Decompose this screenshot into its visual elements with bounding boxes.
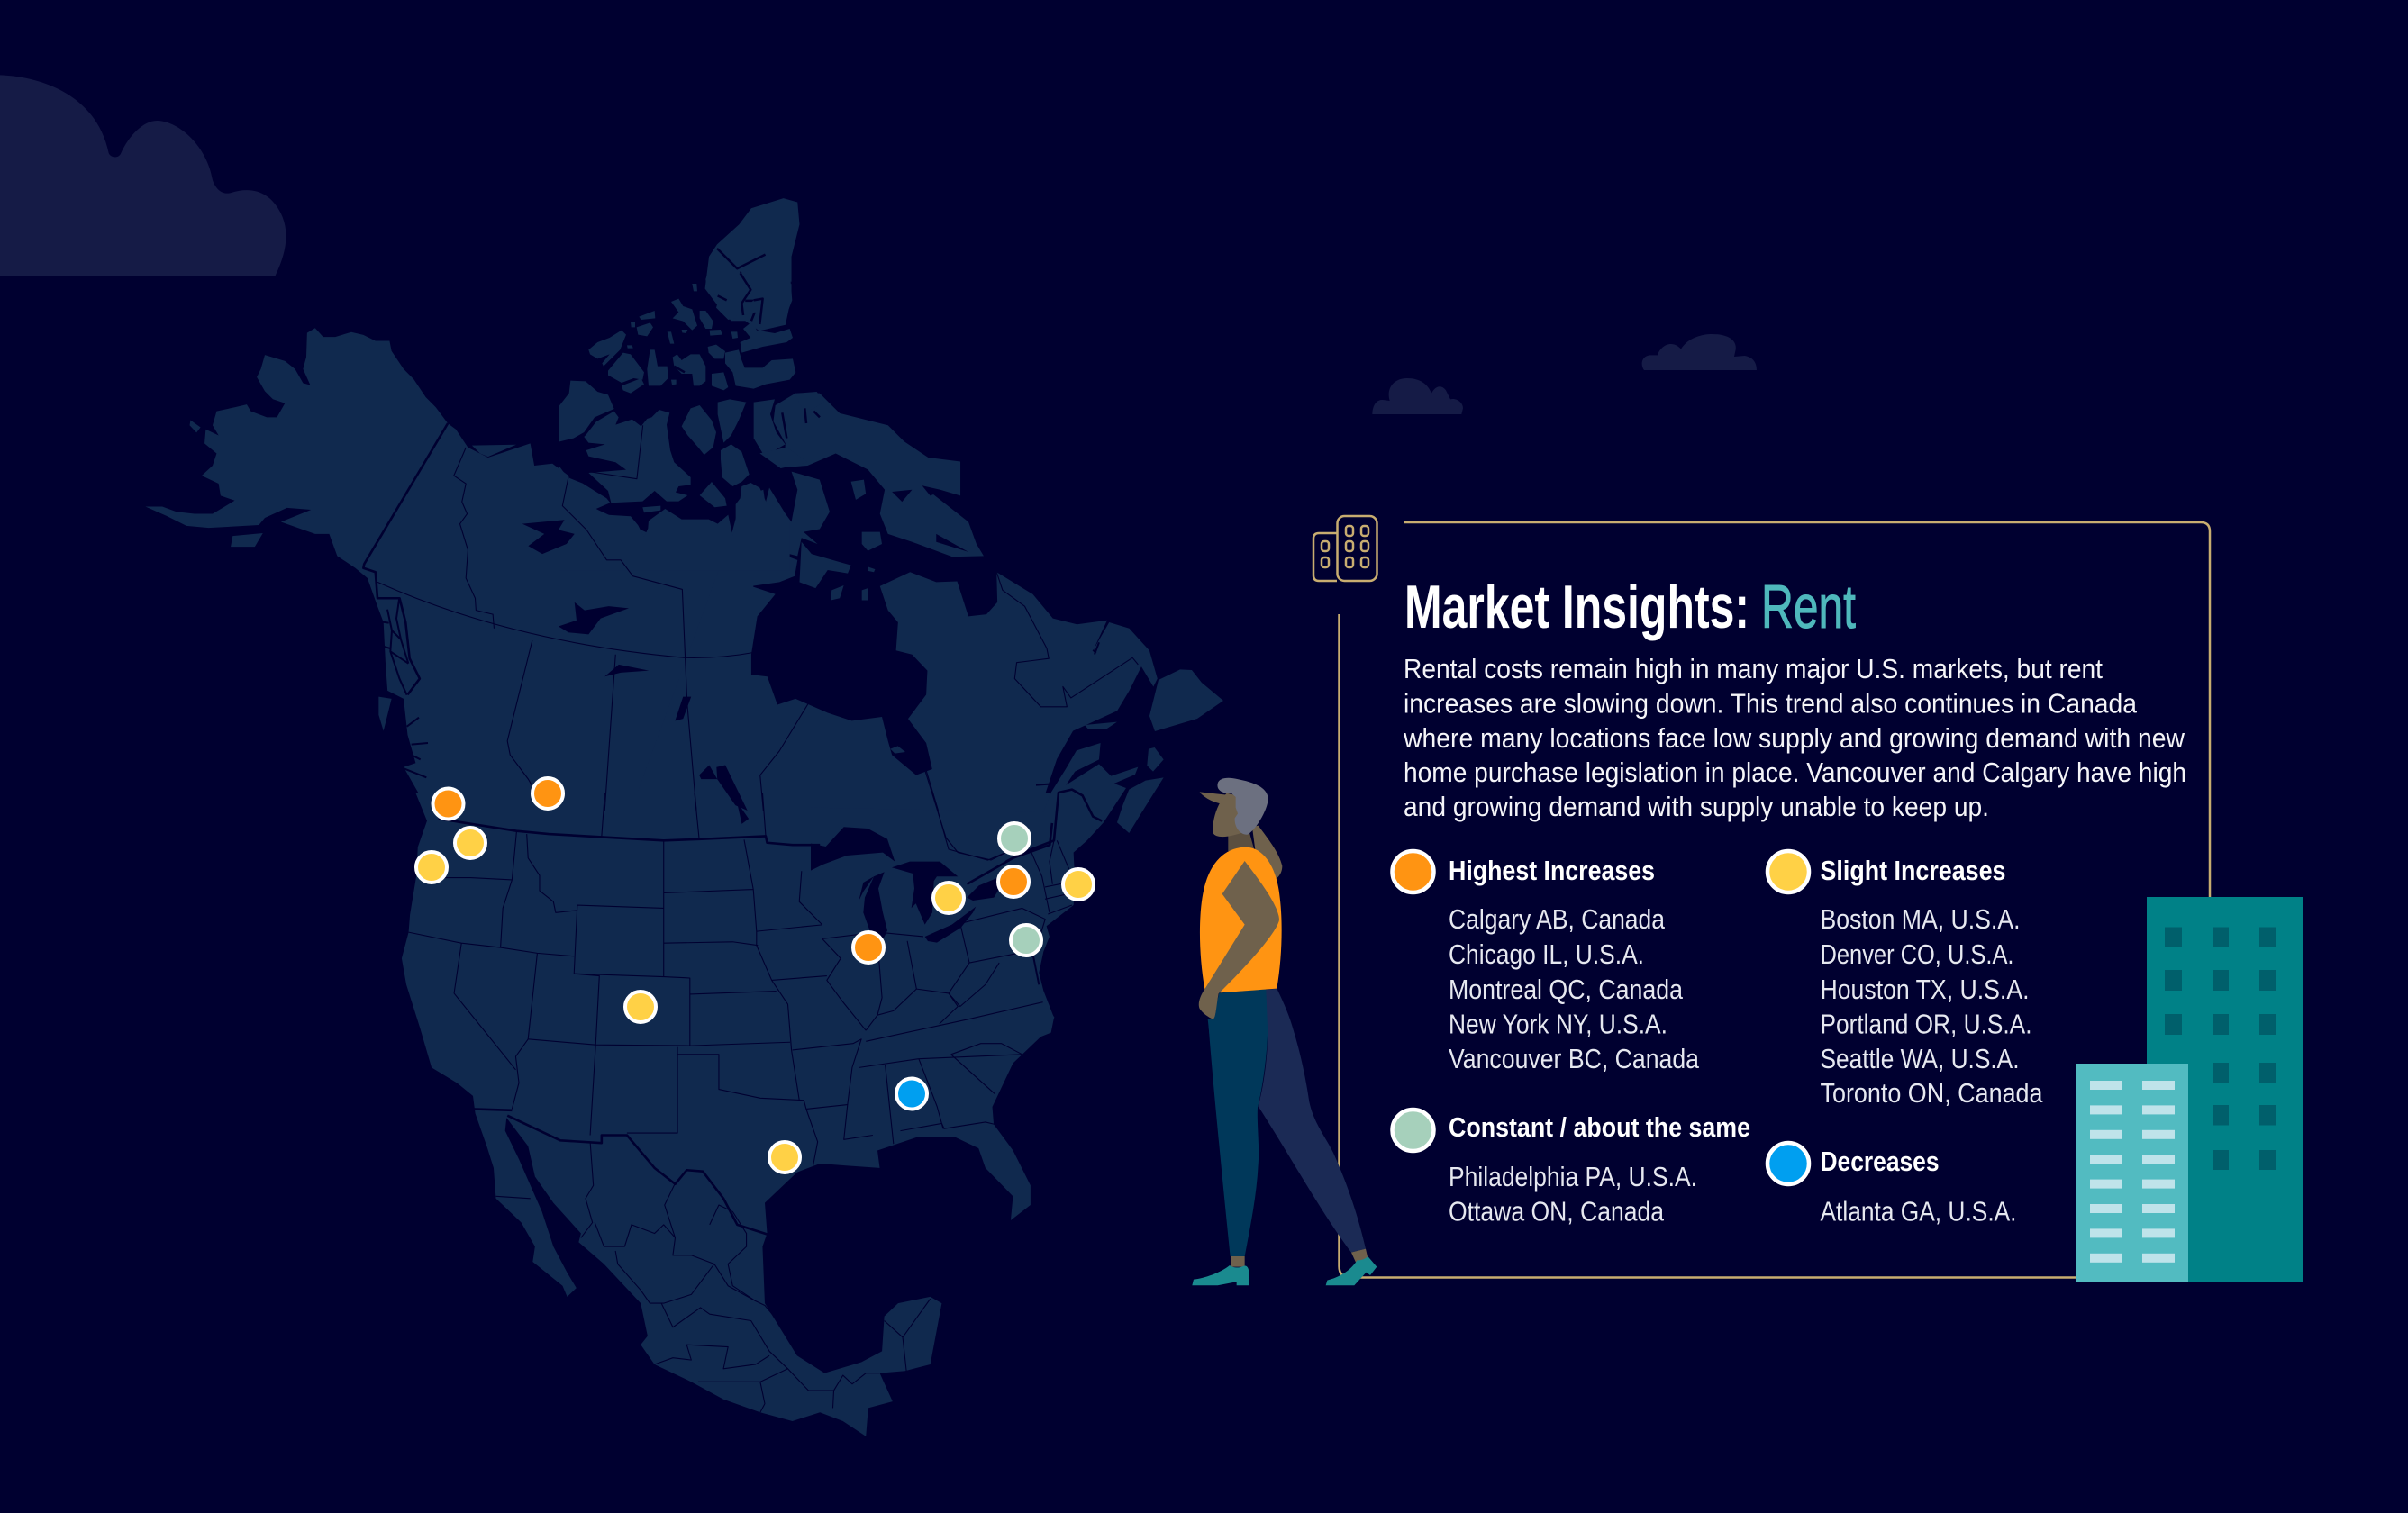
illustration: person bbox=[1192, 778, 1377, 1285]
legend: constant: Constant / about the same bbox=[1449, 1111, 1750, 1143]
land: Arctic archipelago and mainland Arctic coast bbox=[559, 270, 824, 570]
border lines: northeast U.S. bbox=[925, 770, 1102, 914]
person lower body bbox=[1192, 1027, 1377, 1285]
legend: slight increases bbox=[1767, 851, 2043, 1109]
legend: decreases: Decreases bbox=[1820, 1146, 1939, 1177]
legend: highest increases: New York NY, U.S.A. bbox=[1449, 1009, 1667, 1039]
illustration: short building bbox=[2076, 1064, 2188, 1282]
marker: Philadelphia, constant bbox=[1011, 925, 1041, 956]
map of North America bbox=[145, 198, 1223, 1436]
intro paragraph: Rental costs remain high in many major U.S. markets, but rent bbox=[1404, 653, 2103, 684]
icon: buildings bbox=[1313, 516, 1377, 581]
intro paragraph: and growing demand with supply unable to keep up. bbox=[1404, 791, 1989, 822]
legend: slight increases: Toronto ON, Canada bbox=[1820, 1077, 2043, 1109]
legend: highest increases: Montreal QC, Canada bbox=[1449, 974, 1684, 1005]
border lines: eastern Canada bbox=[760, 572, 1138, 811]
intro paragraph: increases are slowing down. This trend also continues in Canada bbox=[1404, 688, 2138, 719]
illustration: tall building bbox=[2147, 897, 2303, 1282]
border lines: Canada bbox=[363, 423, 753, 811]
marker: Denver, slight increase bbox=[625, 992, 656, 1022]
legend: highest increases: Chicago IL, U.S.A. bbox=[1449, 938, 1644, 970]
legend: highest increases: Calgary AB, Canada bbox=[1449, 903, 1666, 935]
marker: Montreal, highest increase bbox=[998, 866, 1029, 897]
small cloud left bbox=[1372, 378, 1463, 414]
intro paragraph: home purchase legislation in place. Vancouver and Calgary have high bbox=[1404, 756, 2186, 788]
title: Market Insights: bbox=[1404, 573, 1749, 641]
marker: Chicago, highest increase bbox=[853, 932, 884, 963]
intro paragraph bbox=[1403, 653, 2186, 822]
land: eastern Canada and Ellesmere bbox=[631, 198, 1158, 811]
marker: Toronto, slight increase bbox=[933, 883, 964, 913]
land: Alaska and western Canada bbox=[145, 328, 769, 811]
legend: constant: Philadelphia PA, U.S.A. bbox=[1449, 1161, 1697, 1192]
legend: highest increases bbox=[1393, 851, 1700, 1074]
person upper body bbox=[1199, 778, 1295, 1036]
legend: slight increases: Houston TX, U.S.A. bbox=[1820, 974, 2029, 1005]
marker: Vancouver, highest increase bbox=[432, 789, 463, 820]
lakes: Great Lakes bbox=[811, 642, 1099, 984]
small cloud right bbox=[1642, 334, 1757, 370]
panel frame bbox=[1339, 522, 2210, 1277]
marker: Ottawa, constant bbox=[999, 823, 1030, 854]
title: Rent bbox=[1761, 573, 1856, 641]
border lines: United States and Mexico bbox=[409, 793, 1052, 1412]
intro paragraph: where many locations face low supply and growing demand with new bbox=[1403, 722, 2185, 754]
legend: decreases: Atlanta GA, U.S.A. bbox=[1820, 1196, 2016, 1227]
legend: constant: Ottawa ON, Canada bbox=[1449, 1196, 1665, 1227]
coast detail: British Columbia panhandle and fjords bbox=[378, 597, 428, 777]
legend: slight increases: Portland OR, U.S.A. bbox=[1820, 1009, 2032, 1039]
legend: highest increases: Vancouver BC, Canada bbox=[1449, 1043, 1700, 1074]
marker: Portland, slight increase bbox=[416, 852, 447, 883]
marker: Boston, slight increase bbox=[1063, 869, 1094, 900]
legend: constant bbox=[1393, 1110, 1750, 1227]
marker: Houston, slight increase bbox=[769, 1142, 800, 1173]
legend: slight increases: Denver CO, U.S.A. bbox=[1820, 938, 2014, 970]
lakes: northern Canada bbox=[522, 520, 748, 811]
land: northeast U.S. and Atlantic Canada bbox=[811, 669, 1223, 1045]
legend: slight increases: Boston MA, U.S.A. bbox=[1820, 903, 2020, 935]
marker: Atlanta, decrease bbox=[896, 1079, 927, 1110]
legend: highest increases: Highest Increases bbox=[1449, 855, 1655, 886]
large cloud bbox=[0, 75, 286, 276]
legend: decreases bbox=[1767, 1143, 2016, 1227]
marker: Calgary, highest increase bbox=[532, 778, 563, 809]
land: United States and Mexico bbox=[402, 793, 1054, 1436]
legend: slight increases: Slight Increases bbox=[1820, 855, 2005, 886]
marker: Seattle, slight increase bbox=[455, 828, 486, 858]
legend: slight increases: Seattle WA, U.S.A. bbox=[1820, 1043, 2020, 1074]
